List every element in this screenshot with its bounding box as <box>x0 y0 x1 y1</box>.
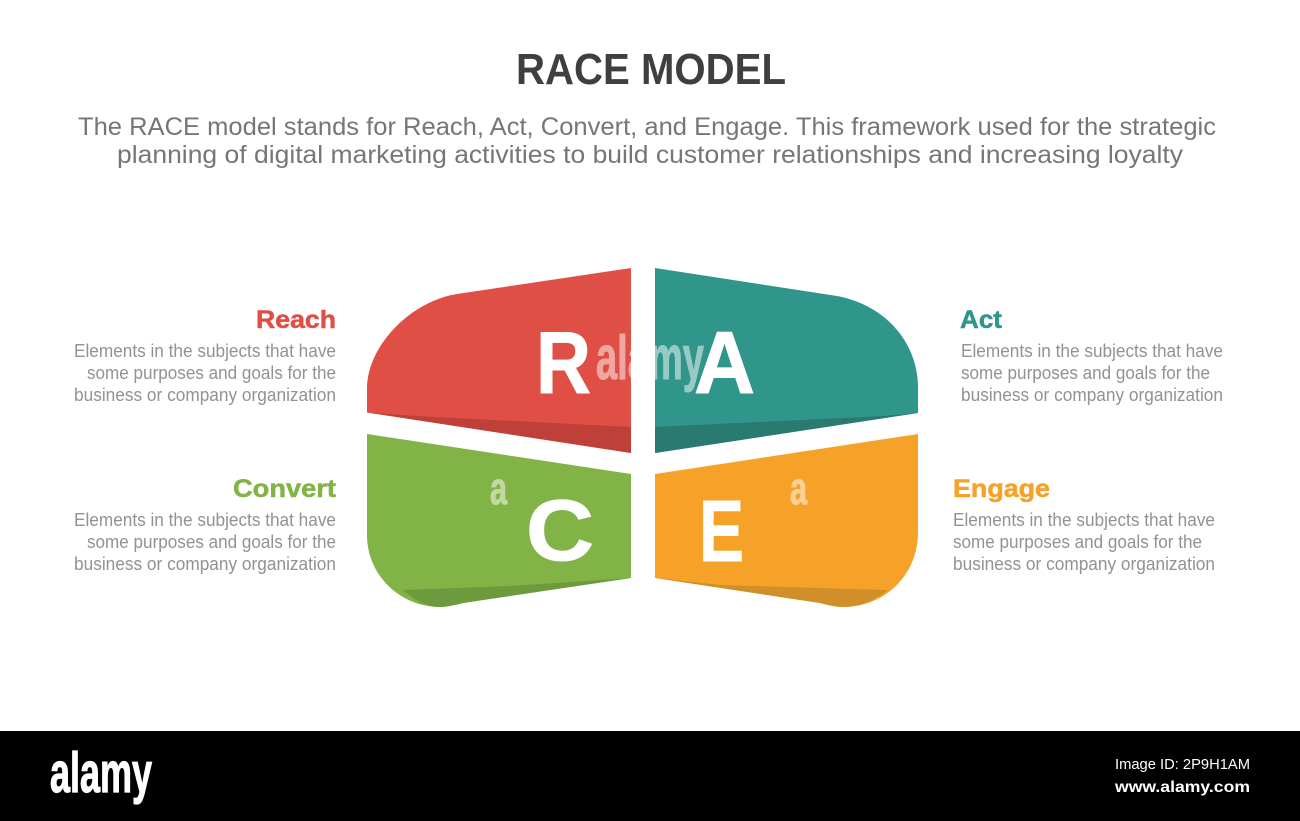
panel: convert text: some purposes and goals for the <box>87 532 336 552</box>
subtitle: planning of digital marketing activities to build customer relationships and increasing loyalty <box>117 141 1184 169</box>
segment: R reach: R <box>536 313 591 412</box>
panel: reach text: business or company organization <box>74 385 336 405</box>
title: RACE MODEL <box>516 45 786 94</box>
watermark: small a left: a <box>490 463 508 514</box>
segment: A act <box>655 268 918 453</box>
panel: convert text <box>74 475 337 574</box>
segment: C convert <box>367 434 631 607</box>
panel: act text: some purposes and goals for the <box>961 363 1210 383</box>
footer url: www.alamy.com <box>1114 779 1250 796</box>
subtitle: The RACE model stands for Reach, Act, Convert, and Engage. This framework used for the strategic <box>78 113 1216 141</box>
panel: engage text: Elements in the subjects that have <box>953 510 1215 530</box>
panel: engage text: Engage <box>953 475 1050 503</box>
panel: convert text: business or company organization <box>74 554 336 574</box>
footer image id: Image ID: 2P9H1AM <box>1115 756 1250 773</box>
panel: engage text: business or company organization <box>953 554 1215 574</box>
panel: act text: Act <box>960 306 1003 334</box>
panel: reach text: some purposes and goals for the <box>87 363 336 383</box>
panel: act text <box>960 306 1223 405</box>
panel: reach text: Reach <box>256 306 336 334</box>
segment: R reach <box>367 268 631 453</box>
segment: E engage <box>655 434 918 607</box>
footer bar <box>0 731 1300 821</box>
panel: engage text <box>953 475 1215 574</box>
segment: C convert: C <box>526 483 594 579</box>
segment: A act: A <box>694 313 755 412</box>
panel: convert text: Elements in the subjects that have <box>74 510 336 530</box>
watermark: alamy center: alamy <box>596 324 704 393</box>
panel: act text: business or company organization <box>961 385 1223 405</box>
subtitle <box>78 113 1216 169</box>
panel: convert text: Convert <box>233 475 337 503</box>
watermark: small a right: a <box>790 463 808 514</box>
segment: E engage: E <box>699 483 744 580</box>
panel: engage text: some purposes and goals for the <box>953 532 1202 552</box>
panel: reach text <box>74 306 336 405</box>
panel: reach text: Elements in the subjects that have <box>74 341 336 361</box>
footer logo: alamy <box>50 741 152 805</box>
panel: act text: Elements in the subjects that have <box>961 341 1223 361</box>
